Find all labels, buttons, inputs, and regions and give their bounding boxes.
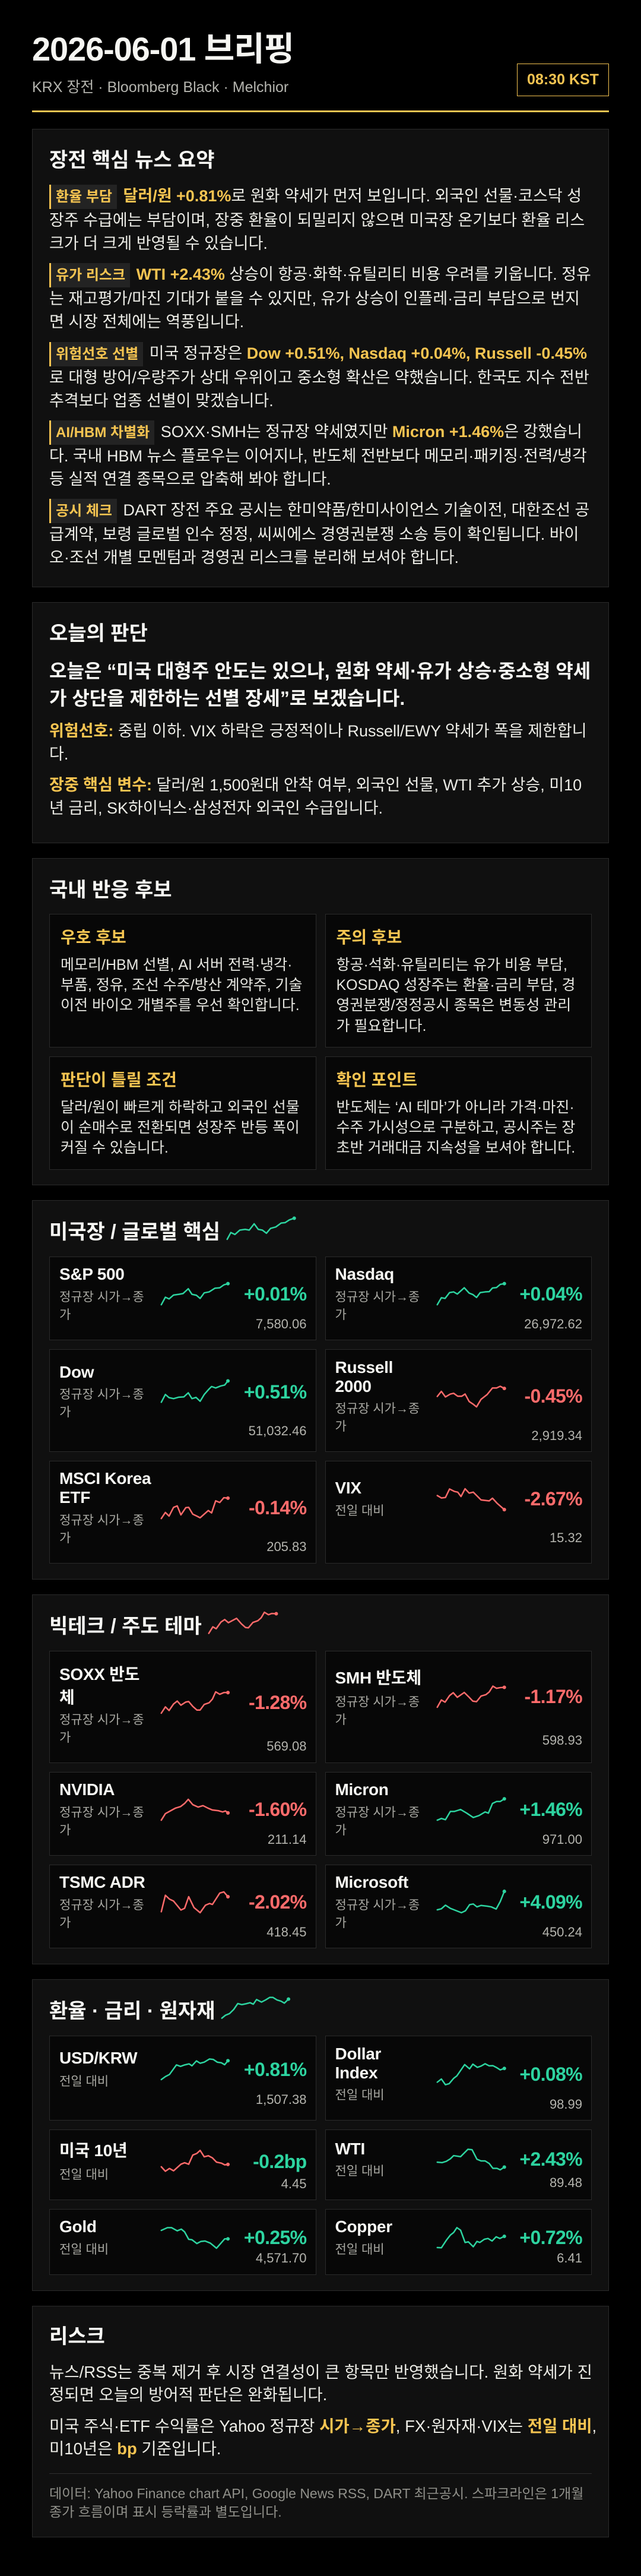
basis: 가	[59, 1406, 71, 1419]
basis	[59, 1290, 144, 1322]
name	[59, 1665, 139, 1707]
sparkline	[160, 1281, 230, 1305]
basis	[59, 1514, 144, 1545]
basis: 전일 대비	[59, 2168, 109, 2182]
name: 미국 10년	[59, 2141, 128, 2160]
name: Micron	[335, 1780, 389, 1799]
panel: today's call	[32, 602, 609, 843]
basis: 전일 대비	[59, 2243, 109, 2257]
heading: risk: 리스크	[49, 2325, 105, 2348]
name: NVIDIA	[59, 1780, 115, 1799]
card: favorable: 이전 바이오 개별주를 우선 확인합니다.	[61, 997, 300, 1014]
card: Copper	[325, 2209, 592, 2275]
title: 2026-06-01 브리핑	[32, 30, 294, 68]
change: -0.2bp	[253, 2151, 306, 2172]
basis	[59, 1713, 144, 1745]
time badge	[517, 64, 609, 96]
basis: 정규장 시가→종	[59, 1514, 144, 1527]
level: 2,919.34	[531, 1428, 582, 1443]
card: invalidation: 커질 수 있습니다.	[61, 1140, 169, 1156]
news: FX: 장주 수급에는 부담이며, 장중 환율이 되밀리지 않으면 미국장 온기보다 환율 리스	[49, 211, 585, 229]
panel: FX rates commodities	[32, 1979, 609, 2291]
intraday variables text: 장중 핵심 변수: 달러/원 1,500원대 안착 여부, 외국인 선물, WTI 추가 상승, 미10	[49, 776, 582, 793]
sparkline	[160, 1798, 230, 1821]
card: caution: 항공·석화·유틸리티는 유가 비용 부담,	[336, 957, 567, 973]
panel: domestic candidates	[32, 858, 609, 1185]
key statement: 가 상단을 제한하는 선별 장세”로 보겠습니다.	[49, 688, 405, 709]
card: MSCI Korea ETF	[49, 1461, 316, 1564]
name: 체	[59, 1688, 74, 1707]
card: favorable: 메모리/HBM 선별, AI 서버 전력·냉각·	[61, 957, 293, 973]
news: risk appetite: 미국 정규장은 Dow +0.51%, Nasdaq +0.04%, Russell -0.45%	[150, 344, 587, 362]
news: FX: 달러/원 +0.81%로 원화 약세가 먼저 보입니다. 외국인 선물·코스닥 성	[123, 187, 582, 205]
basis	[335, 1695, 420, 1727]
heading: FX rates commodities: 환율 · 금리 · 원자재	[49, 2000, 215, 2023]
basis: 전일 대비	[335, 2088, 385, 2102]
time badge: 08:30 KST	[527, 71, 599, 88]
name: SMH 반도체	[335, 1669, 421, 1687]
basis	[59, 1898, 144, 1930]
card: caution	[325, 914, 592, 1048]
sparkline	[437, 1890, 506, 1913]
sparkline	[160, 2147, 231, 2175]
name: VIX	[335, 1479, 361, 1497]
risk text 1: 뉴스/RSS는 중복 제거 후 시장 연결성이 큰 항목만 반영했습니다. 원화 약세가 진	[49, 2363, 592, 2381]
card: check points: 확인 포인트	[336, 1071, 417, 1089]
sparkline	[160, 2058, 230, 2081]
level: 569.08	[266, 1739, 306, 1754]
news: disclosures: 오·조선 개별 모멘텀과 경영권 리스크를 분리해 보셔야 합니다.	[49, 549, 459, 567]
news: FX: 환율 부담	[56, 189, 112, 205]
level: 450.24	[542, 1925, 582, 1939]
level: 598.93	[542, 1733, 582, 1748]
heading: US global: 미국장 / 글로벌 핵심	[49, 1221, 220, 1243]
news: disclosures	[49, 499, 589, 567]
change: +1.46%	[519, 1799, 582, 1820]
change: +0.72%	[519, 2227, 582, 2248]
card: USD/KRW	[49, 2036, 316, 2121]
card: check points: 초반 거래대금 지속성을 보셔야 합니다.	[336, 1140, 575, 1156]
change: +0.04%	[519, 1283, 582, 1305]
panel: US global	[32, 1200, 609, 1580]
basis: 전일 대비	[335, 2243, 385, 2257]
name: ETF	[59, 1488, 90, 1507]
panel: news summary	[32, 129, 609, 587]
subtitle: KRX 장전 · Bloomberg Black · Melchior	[32, 79, 288, 96]
card: US 10Y	[49, 2129, 316, 2200]
basis: 가	[59, 1308, 71, 1322]
basis: 정규장 시가→종	[59, 1290, 144, 1304]
news paragraphs	[49, 185, 591, 567]
card: invalidation: 이 순매수로 전환되면 성장주 반등 폭이	[61, 1119, 300, 1136]
card: VIX	[325, 1461, 592, 1564]
card: Micron	[325, 1772, 592, 1856]
heading sparkline	[221, 1996, 290, 2019]
card: caution: 가 필요합니다.	[336, 1018, 426, 1034]
news: AI HBM: 다. 국내 HBM 뉴스 플로우는 이어지나, 반도체 전반보다 메모리·패키징·전력/냉각	[49, 447, 587, 465]
risk text 2: 미10년은 bp 기준입니다.	[49, 2439, 221, 2458]
basis: 가	[335, 1713, 347, 1727]
sparkline	[160, 1379, 230, 1403]
sparkline	[436, 1385, 506, 1407]
basis: 정규장 시가→종	[59, 1898, 144, 1912]
news: AI HBM: AI/HBM 차별화	[56, 425, 150, 441]
news: AI HBM: 등 실적 연결 종목으로 압축해 봐야 합니다.	[49, 470, 331, 488]
basis: 가	[335, 1308, 347, 1322]
basis: 정규장 시가→종	[335, 1806, 420, 1819]
change: +0.01%	[244, 1283, 306, 1305]
basis	[59, 1388, 144, 1419]
basis: 가	[59, 1731, 71, 1745]
basis	[335, 1898, 420, 1930]
sparkline	[436, 2224, 507, 2252]
card: check points: 수주 가시성으로 구분하고, 공시주는 장	[336, 1119, 575, 1136]
name: Gold	[59, 2217, 97, 2236]
level: 971.00	[542, 1832, 582, 1847]
name: Index	[335, 2064, 377, 2082]
basis: 정규장 시가→종	[59, 1713, 144, 1727]
name: TSMC ADR	[59, 1873, 145, 1891]
change: -0.14%	[249, 1497, 306, 1518]
level: 418.45	[266, 1925, 306, 1939]
change: -0.45%	[524, 1385, 582, 1407]
change: +4.09%	[519, 1891, 582, 1913]
basis: 가	[335, 1916, 347, 1930]
level: 98.99	[550, 2097, 582, 2112]
risk text 2	[49, 2415, 596, 2460]
news: oil	[49, 263, 591, 331]
risk appetite text	[49, 722, 587, 763]
card: S&P 500	[49, 1257, 316, 1340]
card: TSMC ADR	[49, 1865, 316, 1948]
data source note: 데이터: Yahoo Finance chart API, Google News RSS, DART 최근공시. 스파크라인은 1개월	[49, 2486, 583, 2501]
change: +0.08%	[519, 2064, 582, 2085]
basis: 가	[59, 1916, 71, 1930]
card: check points	[325, 1056, 592, 1170]
risk text 2: 미국 주식·ETF 수익률은 Yahoo 정규장 시가→종가, FX·원자재·VIX는 전일 대비,	[49, 2417, 596, 2435]
card: favorable	[49, 914, 316, 1048]
news: risk appetite: 로 대형 방어/우량주가 상대 우위이고 중소형 확산은 약했습니다. 한국도 지수 전반	[49, 369, 589, 387]
change: +0.81%	[244, 2059, 306, 2080]
card: SMH	[325, 1651, 592, 1763]
heading sparkline	[227, 1216, 296, 1240]
sparkline	[436, 1281, 506, 1305]
news: FX	[49, 185, 585, 252]
sparkline	[436, 1685, 506, 1708]
panel: big tech	[32, 1594, 609, 1964]
basis	[335, 1402, 420, 1433]
news: oil: WTI +2.43% 상승이 항공·화학·유틸리티 비용 우려를 키웁니다. 정유	[137, 265, 591, 283]
key statement: 오늘은 “미국 대형주 안도는 있으나, 원화 약세·유가 상승·중소형 약세	[49, 660, 591, 682]
name	[335, 2045, 381, 2082]
basis	[59, 1806, 144, 1837]
risk text 1	[49, 2361, 592, 2406]
level: 1,507.38	[256, 2091, 306, 2107]
change: -1.17%	[524, 1686, 582, 1707]
level: 4,571.70	[256, 2251, 306, 2265]
basis: 가	[59, 1824, 71, 1837]
basis: 정규장 시가→종	[59, 1388, 144, 1401]
card: favorable: 부품, 정유, 조선 수주/방산 계약주, 기술	[61, 977, 303, 993]
change: -1.60%	[249, 1799, 306, 1820]
card: Russell 2000	[325, 1349, 592, 1452]
sparkline	[437, 1797, 506, 1821]
sparkline	[436, 2146, 507, 2173]
name: Dollar	[335, 2045, 381, 2063]
name: USD/KRW	[59, 2049, 137, 2067]
name: WTI	[335, 2140, 365, 2158]
sparkline	[436, 2061, 507, 2088]
change: -2.02%	[249, 1891, 306, 1913]
heading: domestic candidates: 국내 반응 후보	[49, 879, 172, 901]
name	[335, 1358, 393, 1395]
card: caution: 영권분쟁/정정공시 종목은 변동성 관리	[336, 997, 571, 1014]
change: +0.25%	[244, 2227, 306, 2248]
news: disclosures: DART 장전 주요 공시는 한미약품/한미사이언스 기술이전, 대한조선 공	[123, 501, 589, 519]
name: 2000	[335, 1377, 372, 1395]
basis: 가	[335, 1824, 347, 1837]
news: oil: 유가 리스크	[56, 267, 125, 283]
card: invalidation	[49, 1056, 316, 1170]
card: Gold	[49, 2209, 316, 2275]
risk appetite text: 위험선호: 중립 이하. VIX 하락은 긍정적이나 Russell/EWY 약세가 폭을 제한합니	[49, 722, 587, 740]
news: risk appetite: 위험선호 선별	[56, 346, 138, 362]
data source note: 종가 흐름이며 표시 등락률과 별도입니다.	[49, 2504, 282, 2520]
news: oil: 면 시장 전체에는 역풍입니다.	[49, 313, 244, 331]
sparkline	[160, 1891, 230, 1913]
card: Dow	[49, 1349, 316, 1452]
heading: big tech: 빅테크 / 주도 테마	[49, 1615, 202, 1638]
basis: 가	[335, 1420, 347, 1433]
name: SOXX 반도	[59, 1665, 139, 1683]
name: Dow	[59, 1363, 94, 1381]
card: caution: KOSDAQ 성장주는 환율·금리 부담, 경	[336, 977, 576, 993]
card: Nasdaq	[325, 1257, 592, 1340]
basis	[335, 1806, 420, 1837]
basis: 전일 대비	[335, 2164, 385, 2178]
basis: 가	[59, 1531, 71, 1545]
name: Microsoft	[335, 1873, 408, 1891]
card: Dollar Index	[325, 2036, 592, 2121]
level: 26,972.62	[524, 1317, 582, 1331]
card: Microsoft	[325, 1865, 592, 1948]
card: favorable: 우호 후보	[61, 928, 126, 947]
risk appetite text: 다.	[49, 745, 68, 763]
heading: today's call: 오늘의 판단	[49, 622, 148, 645]
card: invalidation: 달러/원이 빠르게 하락하고 외국인 선물	[61, 1099, 300, 1116]
level: 51,032.46	[249, 1423, 306, 1438]
level: 89.48	[550, 2175, 582, 2190]
data source note	[49, 2485, 583, 2521]
news: oil: 는 재고평가/마진 기대가 붙을 수 있지만, 유가 상승이 인플레·금리 부담으로 번지	[49, 290, 580, 308]
news: AI HBM	[49, 420, 587, 488]
news: risk appetite: 추격보다 업종 선별이 맞겠습니다.	[49, 392, 274, 410]
intraday variables text	[49, 776, 582, 817]
level: 205.83	[266, 1539, 306, 1554]
change: -2.67%	[524, 1488, 582, 1509]
card: check points: 반도체는 ‘AI 테마’가 아니라 가격·마진·	[336, 1099, 575, 1116]
sparkline	[160, 2224, 231, 2252]
change: -1.28%	[249, 1692, 306, 1713]
name	[59, 1469, 151, 1507]
key statement	[49, 660, 591, 709]
sparkline	[436, 1488, 506, 1512]
level: 4.45	[281, 2176, 306, 2191]
news: risk appetite	[49, 342, 589, 410]
basis: 정규장 시가→종	[335, 1290, 420, 1304]
basis	[335, 1290, 420, 1322]
intraday variables text: 년 금리, SK하이닉스·삼성전자 외국인 수급입니다.	[49, 799, 383, 817]
news: disclosures: 급계약, 보령 글로벌 인수 정정, 씨씨에스 경영권분쟁 소송 등이 확인됩니다. 바이	[49, 526, 579, 543]
level: 7,580.06	[256, 1317, 306, 1331]
change: +2.43%	[519, 2148, 582, 2170]
sparkline	[160, 1691, 230, 1714]
news: FX: 크가 더 크게 반영될 수 있습니다.	[49, 235, 268, 252]
basis: 정규장 시가→종	[335, 1402, 420, 1416]
news: disclosures: 공시 체크	[56, 503, 112, 519]
card: invalidation: 판단이 틀릴 조건	[61, 1071, 177, 1089]
change: +0.51%	[244, 1381, 306, 1403]
card: WTI	[325, 2129, 592, 2200]
name: S&P 500	[59, 1265, 125, 1283]
level: 211.14	[268, 1832, 306, 1847]
basis: 정규장 시가→종	[335, 1898, 420, 1912]
news: AI HBM: SOXX·SMH는 정규장 약세였지만 Micron +1.46%은 강했습니	[161, 423, 582, 441]
level: 6.41	[557, 2251, 582, 2265]
level: 15.32	[550, 1530, 582, 1545]
heading sparkline	[208, 1612, 278, 1634]
panel: risk	[32, 2306, 609, 2537]
card: NVIDIA	[49, 1772, 316, 1856]
name: Nasdaq	[335, 1265, 394, 1283]
sparkline	[160, 1496, 230, 1519]
name: Copper	[335, 2217, 392, 2236]
heading: news summary: 장전 핵심 뉴스 요약	[49, 149, 215, 172]
card: SOXX	[49, 1651, 316, 1763]
name: MSCI Korea	[59, 1469, 151, 1488]
basis: 정규장 시가→종	[59, 1806, 144, 1819]
name: Russell	[335, 1358, 393, 1376]
basis: 전일 대비	[335, 1504, 385, 1518]
card: caution: 주의 후보	[336, 928, 402, 947]
basis: 정규장 시가→종	[335, 1695, 420, 1709]
basis: 전일 대비	[59, 2075, 109, 2088]
risk text 1: 정되면 오늘의 방어적 판단은 완화됩니다.	[49, 2385, 327, 2404]
